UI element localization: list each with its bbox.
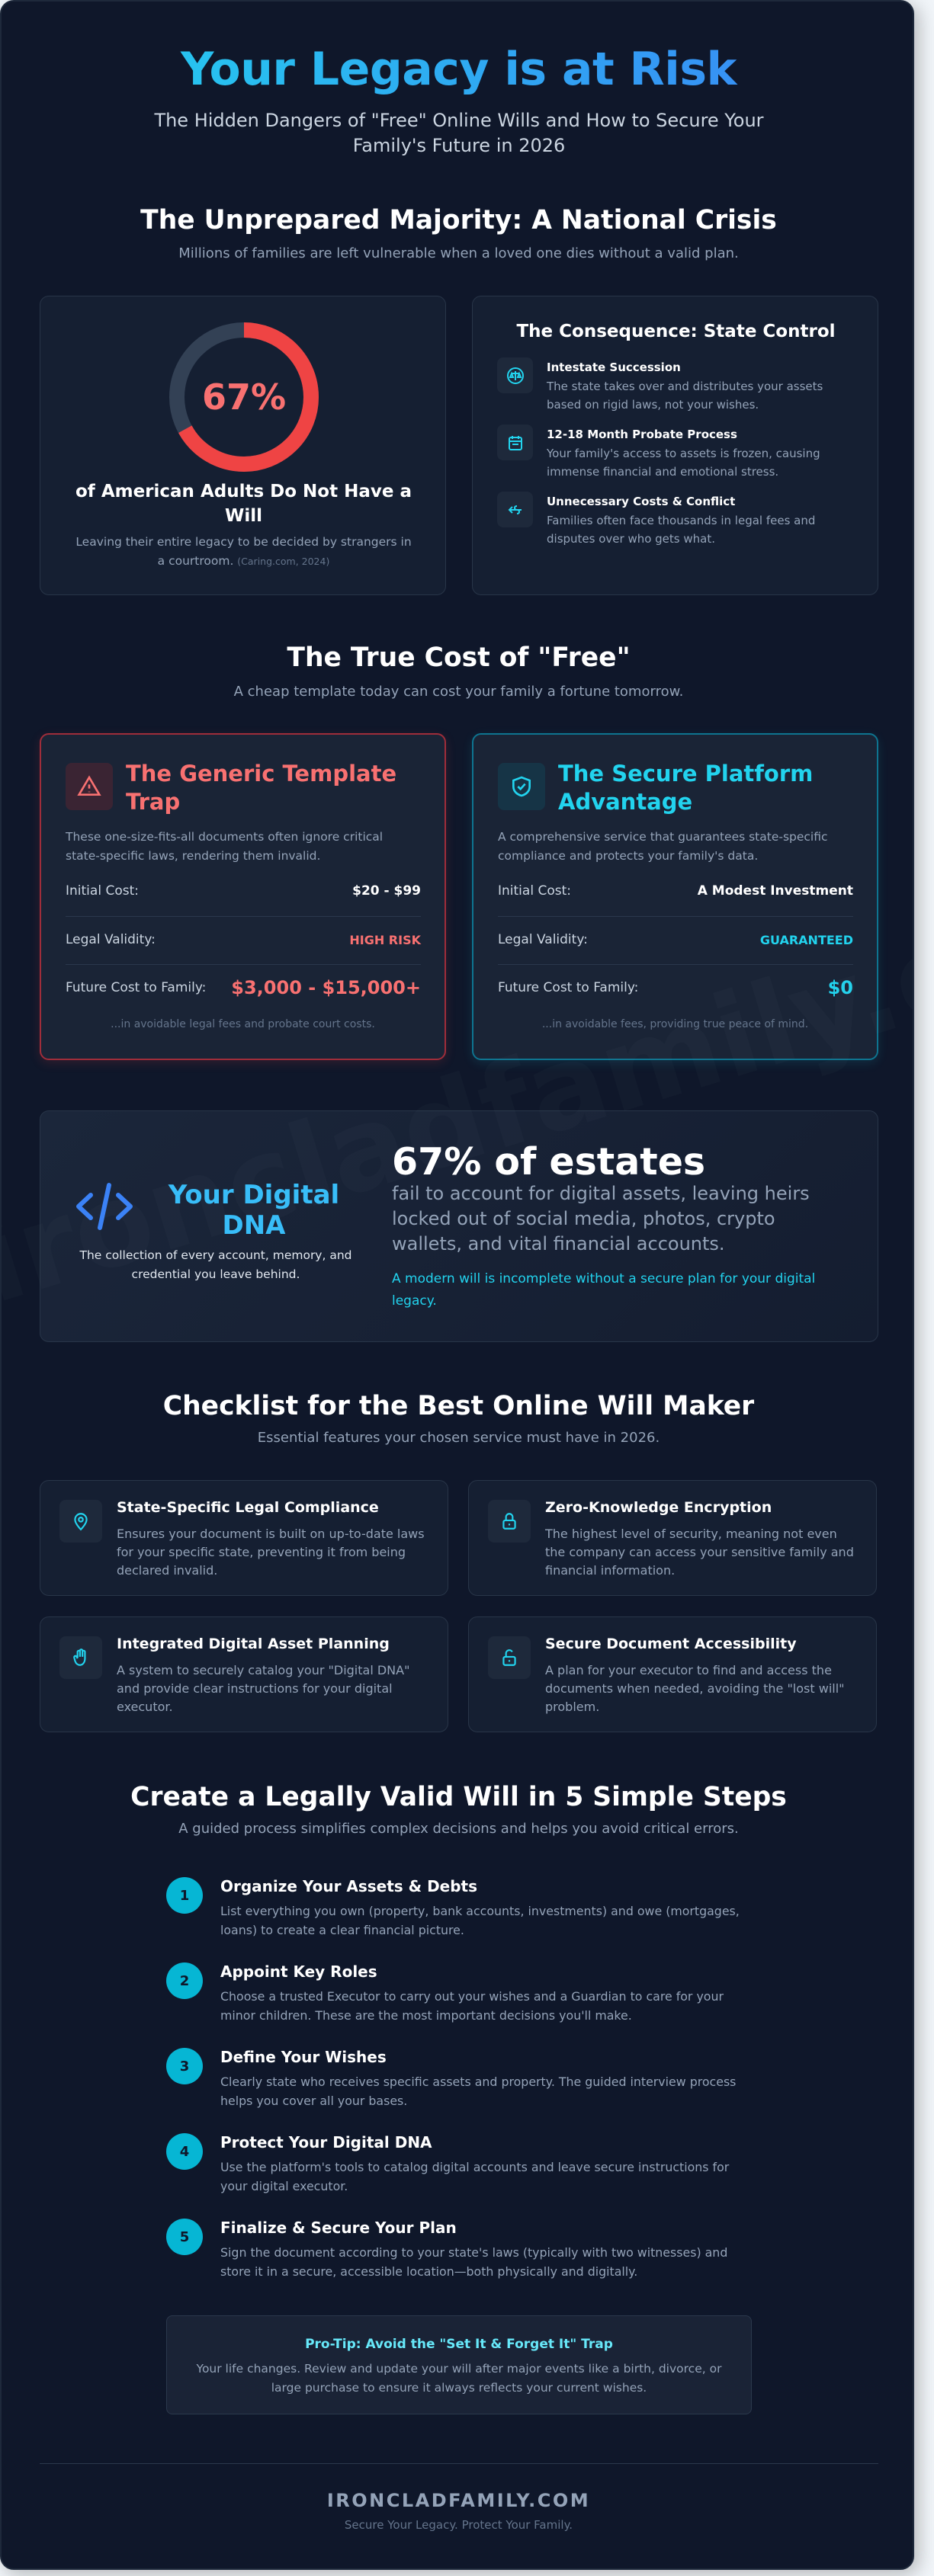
stat description: a courtroom. (Caring.com, 2024)	[158, 554, 329, 568]
panel: 67% stat	[40, 296, 446, 595]
item: costs: Unnecessary Costs & Conflict	[547, 495, 735, 508]
checklist card: encryption: The highest level of security, meaning not even the company can access your sensitive family and financial information.	[545, 1527, 854, 1578]
step 4	[166, 2133, 729, 2193]
footnote: ...in avoidable legal fees and probate court costs.	[111, 1018, 375, 1030]
stat label: of American Adults Do Not Have a Will	[75, 482, 412, 526]
comparison rows: HIGH RISK	[349, 933, 421, 947]
comparison rows: $0	[828, 977, 853, 998]
comparison rows: Initial Cost:	[66, 883, 139, 899]
comparison rows: A Modest Investment	[698, 883, 853, 899]
checklist card: encryption	[468, 1480, 877, 1596]
comparison rows: Future Cost to Family:	[66, 980, 206, 995]
step 3	[166, 2048, 736, 2108]
stat description: Leaving their entire legacy to be decided by strangers in	[75, 535, 412, 549]
heading: steps: Create a Legally Valid Will in 5 Simple Steps	[130, 1782, 787, 1812]
stat heading: 67% of estates	[392, 1140, 705, 1184]
step 1: 1	[180, 1887, 189, 1904]
item: costs	[497, 492, 815, 546]
donut chart: 67%	[202, 376, 286, 418]
step 2: 2	[180, 1972, 189, 1989]
item: costs: Families often face thousands in legal fees and disputes over who gets what.	[547, 514, 815, 546]
step 4: Use the platform's tools to catalog digital accounts and leave secure instructions for your digital executor.	[220, 2160, 729, 2193]
step 1	[166, 1877, 740, 1937]
checklist card: compliance: Ensures your document is built on up-to-date laws for your specific state, preventing it from being declared invalid.	[117, 1527, 425, 1578]
description: A comprehensive service that guarantees state-specific compliance and protects your family's data.	[498, 830, 828, 863]
checklist card: accessibility	[468, 1616, 877, 1732]
subtitle: The Hidden Dangers of "Free" Online Wills and How to Secure Your Family's Future in 2026	[154, 110, 764, 156]
comparison rows	[498, 883, 853, 998]
comparison rows: Legal Validity:	[66, 932, 156, 947]
icon: scales	[497, 357, 533, 393]
callout: A modern will is incomplete without a secure plan for your digital legacy.	[392, 1271, 815, 1309]
step 1: List everything you own (property, bank accounts, investments) and owe (mortgages, loans) to create a clear financial picture.	[220, 1904, 740, 1937]
item: intestate: The state takes over and distributes your assets based on rigid laws, not your wishes.	[547, 380, 823, 412]
item: intestate	[497, 357, 823, 412]
checklist card: compliance: State-Specific Legal Compliance	[117, 1499, 379, 1516]
comparison rows	[66, 883, 421, 998]
subheading: A guided process simplifies complex decisions and helps you avoid critical errors.	[178, 1821, 739, 1837]
step 5: Sign the document according to your state's laws (typically with two witnesses) and store it in a secure, accessible location—both physically and digitally.	[220, 2245, 727, 2279]
icon: shield	[498, 763, 545, 810]
comparison rows: GUARANTEED	[760, 933, 853, 947]
panel: secure platform advantage	[472, 733, 878, 1060]
comparison rows: $20 - $99	[352, 883, 421, 899]
item: probate: 12-18 Month Probate Process	[547, 428, 737, 441]
callout: pro tip: Your life changes. Review and update your will after major events like a birth, divorce, or large purchase to ensure it always reflects your current wishes.	[197, 2362, 721, 2395]
icon: lock	[488, 1500, 531, 1543]
step 2: Appoint Key Roles	[220, 1962, 377, 1981]
panel: consequence	[472, 296, 878, 595]
checklist card: digital asset planning: A system to securely catalog your "Digital DNA" and provide clear instructions for your digital executor.	[117, 1663, 409, 1714]
title: Your Legacy is at Risk	[181, 43, 737, 96]
item: intestate: Intestate Succession	[547, 360, 681, 374]
icon: pin	[59, 1500, 102, 1543]
checklist card: accessibility: A plan for your executor to find and access the documents when needed, avoiding the "lost will" problem.	[545, 1663, 845, 1714]
stat body: fail to account for digital assets, leaving heirs locked out of social media, photos, crypto wallets, and vital financial accounts.	[392, 1183, 810, 1254]
step 5: Finalize & Secure Your Plan	[220, 2219, 457, 2237]
subheading: Essential features your chosen service must have in 2026.	[258, 1430, 660, 1446]
callout: pro tip: Pro-Tip: Avoid the "Set It & Forget It" Trap	[305, 2337, 613, 2352]
step 2: Choose a trusted Executor to carry out your wishes and a Guardian to care for your minor children. These are the most important decisions you'll make.	[220, 1989, 724, 2023]
heading: checklist: Checklist for the Best Online Will Maker	[163, 1391, 754, 1421]
icon: unlocked	[488, 1636, 531, 1679]
icon: hand	[59, 1636, 102, 1679]
item: probate: Your family's access to assets is frozen, causing immense financial and emotional stress.	[547, 447, 820, 479]
subheading: Millions of families are left vulnerable when a loved one dies without a valid plan.	[178, 245, 739, 261]
card title: The Generic Template Trap	[126, 761, 396, 815]
icon: warning	[66, 763, 113, 810]
donut chart	[169, 322, 319, 472]
heading: true cost: The True Cost of "Free"	[287, 642, 631, 673]
footer tagline: Secure Your Legacy. Protect Your Family.	[345, 2518, 573, 2532]
step 1: Organize Your Assets & Debts	[220, 1877, 477, 1895]
footnote: ...in avoidable fees, providing true peace of mind.	[542, 1018, 808, 1030]
subheading: A cheap template today can cost your family a fortune tomorrow.	[234, 684, 683, 700]
checklist card: digital asset planning: Integrated Digital Asset Planning	[117, 1636, 390, 1652]
checklist card: compliance	[40, 1480, 448, 1596]
item: probate	[497, 425, 820, 479]
panel: generic template trap	[40, 733, 446, 1060]
step 4: 4	[180, 2143, 189, 2160]
checklist card: encryption: Zero-Knowledge Encryption	[545, 1499, 772, 1516]
step 4: Protect Your Digital DNA	[220, 2133, 432, 2151]
card title: The Secure Platform Advantage	[558, 761, 813, 815]
step 3: 3	[180, 2058, 189, 2075]
icon: calendar	[497, 425, 533, 460]
panel: digital DNA	[40, 1110, 878, 1342]
checklist card: accessibility: Secure Document Accessibility	[545, 1636, 797, 1652]
panel heading: The Consequence: State Control	[516, 322, 836, 341]
step 2	[166, 1962, 724, 2023]
DNA description: The collection of every account, memory, and credential you leave behind.	[79, 1248, 352, 1281]
comparison rows: Initial Cost:	[498, 883, 571, 899]
comparison rows: $3,000 - $15,000+	[231, 977, 421, 998]
heading: unprepared majority: The Unprepared Majority: A National Crisis	[140, 205, 777, 235]
comparison rows: Future Cost to Family:	[498, 980, 638, 995]
step 3: Clearly state who receives specific assets and property. The guided interview process helps you cover all your bases.	[220, 2075, 736, 2108]
checklist card: digital asset planning	[40, 1616, 448, 1732]
description: These one-size-fits-all documents often ignore critical state-specific laws, rendering them invalid.	[66, 830, 383, 863]
icon: code	[76, 1183, 133, 1230]
comparison rows: Legal Validity:	[498, 932, 588, 947]
step 3: Define Your Wishes	[220, 2048, 387, 2066]
icon: arrows	[497, 492, 533, 527]
callout: pro tip	[166, 2315, 752, 2414]
stat description	[75, 535, 412, 568]
step 5	[166, 2219, 727, 2279]
DNA title: Your Digital DNA	[169, 1180, 339, 1241]
step 5: 5	[180, 2228, 189, 2245]
footer brand: IRONCLADFAMILY.COM	[327, 2490, 590, 2511]
